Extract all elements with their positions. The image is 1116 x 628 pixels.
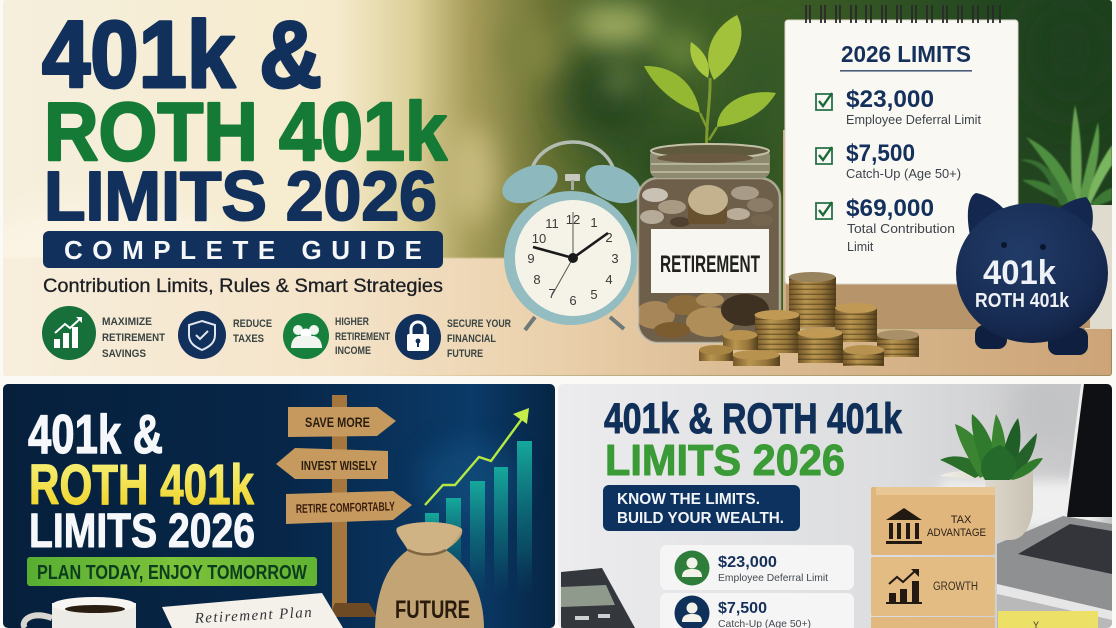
benefit: higher retirement income: HIGHER xyxy=(335,316,369,328)
icon: laptop xyxy=(997,384,1112,628)
block: tax advantage xyxy=(871,487,995,555)
notepad: 2026 limits: 2026 LIMITS xyxy=(841,41,971,67)
icon: alarm clock: 11 xyxy=(545,216,559,231)
benefit: maximize retirement savings: RETIREMENT xyxy=(102,332,165,344)
icon: potted plant xyxy=(940,414,1043,540)
block: growth xyxy=(871,557,995,616)
limit: $7,500 xyxy=(816,140,961,181)
signpost xyxy=(276,395,412,617)
benefit: higher retirement income: INCOME xyxy=(335,345,371,357)
icon: glass jar of coins xyxy=(635,144,780,343)
icon: people in green circle xyxy=(283,313,329,359)
card: employee deferral limit xyxy=(660,545,854,590)
sign: save more xyxy=(288,407,396,437)
limit: $69,000 xyxy=(816,195,955,254)
jar label: retirement xyxy=(651,229,769,293)
benefit: secure your financial future: FINANCIAL xyxy=(447,333,496,345)
limit: $23,000: $23,000 xyxy=(846,86,934,113)
arrow: growth line xyxy=(425,408,529,505)
panel: main hero banner xyxy=(0,0,1115,376)
block: partial third block xyxy=(871,617,995,628)
icon: coffee mug xyxy=(24,597,136,628)
icon: padlock in navy circle xyxy=(395,314,441,360)
limit: $23,000: Employee Deferral Limit xyxy=(846,113,982,127)
subtitle: Contribution Limits, Rules & Smart Strategies xyxy=(43,276,443,297)
icon: navy piggy bank: 401k xyxy=(983,254,1056,292)
sign: retire comfortably xyxy=(286,491,412,524)
icon: money bag labelled future: FUTURE xyxy=(395,596,470,624)
benefit: secure your financial future: FUTURE xyxy=(447,348,483,360)
panel: know the limits light banner xyxy=(558,370,1112,628)
icon: alarm clock: 7 xyxy=(548,286,556,301)
icon: alarm clock: 12 xyxy=(566,212,580,227)
icon: navy piggy bank: ROTH 401k xyxy=(975,290,1070,312)
banner: know the limits xyxy=(603,485,800,531)
sign: invest wisely xyxy=(276,448,388,479)
card: catch-up: $7,500 xyxy=(718,600,767,617)
icon: alarm clock: 10 xyxy=(532,231,546,246)
benefit: reduce taxes: TAXES xyxy=(233,333,264,345)
icon: coin stacks xyxy=(699,272,919,366)
icon: calculator xyxy=(561,568,635,628)
title: Roth 401k: ROTH 401k xyxy=(29,453,254,517)
icon: shield in navy circle xyxy=(178,311,226,359)
sticky note xyxy=(998,611,1098,628)
benefit: maximize retirement savings: MAXIMIZE xyxy=(102,316,152,328)
title: 401k and: 401k & xyxy=(42,2,322,108)
title: limits 2026: LIMITS 2026 xyxy=(44,157,437,235)
block: tax advantage: TAX xyxy=(951,514,972,526)
icon: alarm clock: 8 xyxy=(533,272,541,287)
card: employee deferral limit: Employee Deferral Limit xyxy=(718,572,828,584)
title: 401k and: 401k & xyxy=(28,403,163,465)
icon: alarm clock: 6 xyxy=(569,293,577,308)
benefit: maximize retirement savings xyxy=(102,318,165,357)
limit: $69,000: Total Contribution xyxy=(847,222,955,236)
limit: $7,500: $7,500 xyxy=(846,140,915,167)
icon: alarm clock: 4 xyxy=(605,272,613,287)
card: catch-up xyxy=(660,593,854,628)
title: limits 2026: LIMITS 2026 xyxy=(29,505,255,558)
notebook: retirement plan: Retirement Plan xyxy=(193,605,312,627)
benefit: secure your financial future: SECURE YOUR xyxy=(447,318,511,330)
banner: know the limits: KNOW THE LIMITS. xyxy=(617,491,760,508)
icon: alarm clock: 5 xyxy=(590,287,598,302)
benefit: secure your financial future xyxy=(447,320,511,357)
card: employee deferral limit: $23,000 xyxy=(718,554,777,571)
icon: alarm clock: 2 xyxy=(605,230,613,245)
benefit: higher retirement income xyxy=(336,318,390,354)
icon: navy piggy bank xyxy=(956,193,1108,355)
notebook: retirement plan xyxy=(162,593,343,628)
benefit: reduce taxes: REDUCE xyxy=(233,318,272,330)
title: Roth 401k: ROTH 401k xyxy=(44,85,448,178)
bar chart: rising teal bars xyxy=(425,441,532,580)
icon: plant sprout xyxy=(644,15,776,157)
icon: alarm clock xyxy=(497,142,646,330)
panel: plan today dark banner xyxy=(3,384,555,628)
benefit: higher retirement income: RETIREMENT xyxy=(335,331,390,343)
icon: alarm clock: 3 xyxy=(611,251,619,266)
sign: save more: SAVE MORE xyxy=(305,415,370,430)
icon: chart in green circle xyxy=(42,306,96,360)
limit: $23,000 xyxy=(816,86,982,127)
notepad: 2026 limits xyxy=(783,5,1090,328)
limit: $7,500: Catch-Up (Age 50+) xyxy=(846,167,961,181)
block: tax advantage: ADVANTAGE xyxy=(927,527,986,539)
jar label: retirement: RETIREMENT xyxy=(660,251,760,278)
banner: plan today enjoy tomorrow: PLAN TODAY, ENJOY TOMORROW xyxy=(37,562,307,584)
sign: retire comfortably: RETIRE COMFORTABLY xyxy=(296,499,395,516)
benefit: maximize retirement savings: SAVINGS xyxy=(102,348,146,360)
title: 401k and Roth 401k: 401k & ROTH 401k xyxy=(604,395,902,443)
icon: alarm clock: 1 xyxy=(590,215,598,230)
icon: background plant xyxy=(1020,105,1112,207)
banner: know the limits: BUILD YOUR WEALTH. xyxy=(617,510,784,527)
limit: $69,000: $69,000 xyxy=(846,195,934,222)
title: limits 2026: LIMITS 2026 xyxy=(605,436,845,485)
icon: alarm clock: 9 xyxy=(527,251,535,266)
block: growth: GROWTH xyxy=(933,581,978,593)
icon: pot behind piggy bank xyxy=(1085,205,1112,329)
sign: invest wisely: INVEST WISELY xyxy=(301,458,377,473)
banner: plan today enjoy tomorrow xyxy=(27,557,317,586)
benefit: reduce taxes xyxy=(233,320,272,342)
banner: complete guide: COMPLETE GUIDE xyxy=(64,235,422,265)
icon: money bag labelled future xyxy=(375,522,484,628)
limit: $69,000: Limit xyxy=(847,240,874,254)
